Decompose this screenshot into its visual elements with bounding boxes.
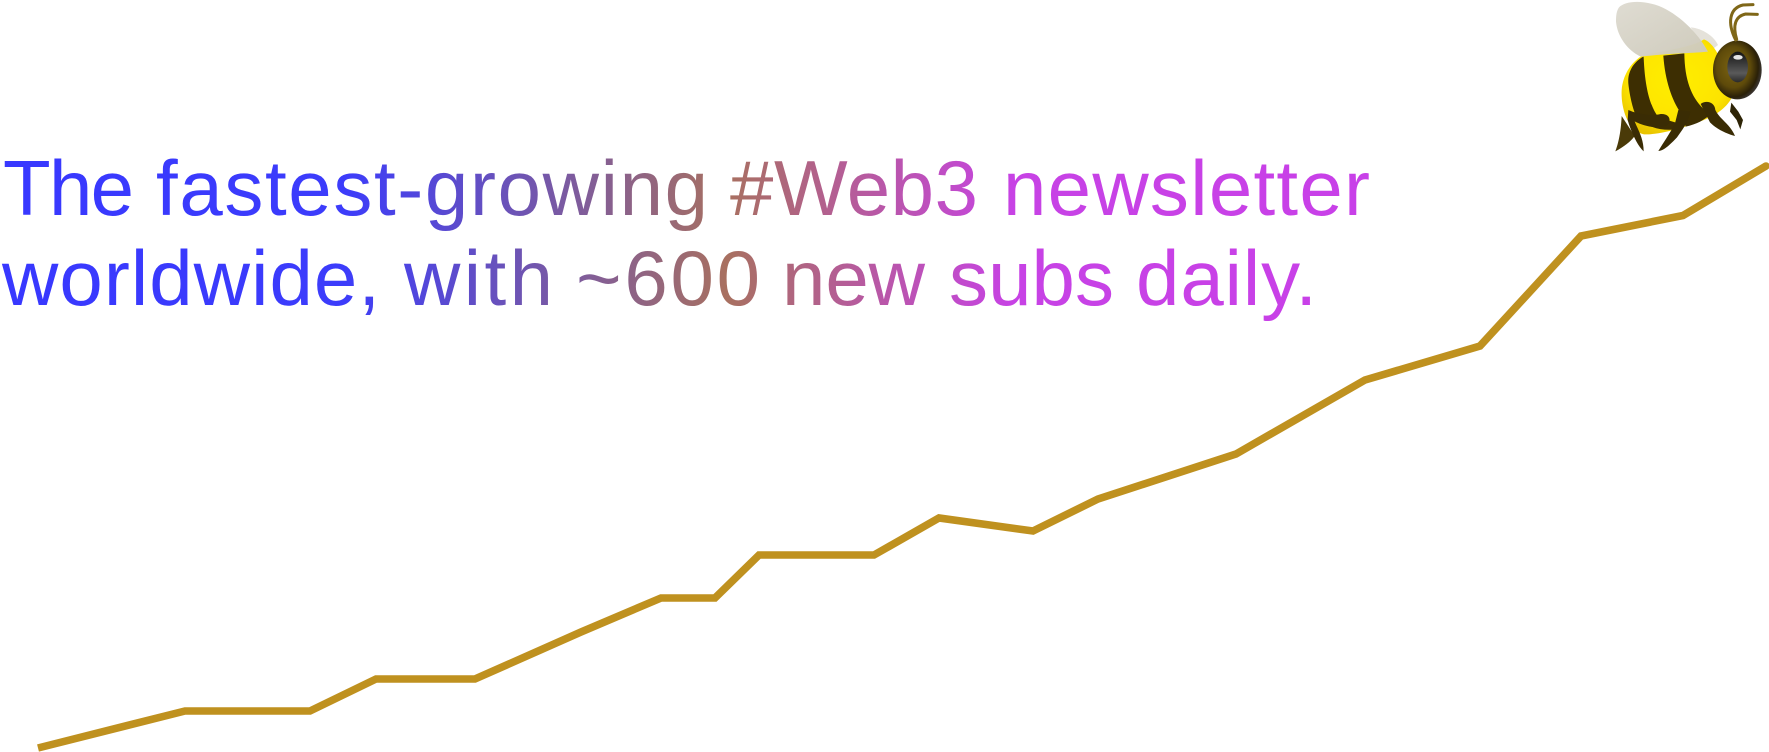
bee body bbox=[1622, 39, 1732, 134]
headline line 1: #Web3 bbox=[730, 144, 978, 232]
bee eye bbox=[1727, 52, 1748, 82]
headline line 1: newsletter bbox=[1003, 144, 1370, 232]
bee antennae bbox=[1731, 5, 1757, 40]
headline line 2: ~600 bbox=[576, 234, 760, 322]
headline line 2 bbox=[1, 234, 1317, 322]
bee far wing bbox=[1691, 27, 1718, 53]
headline line 1: fastest-growing bbox=[156, 144, 708, 232]
headline bbox=[1, 144, 1370, 322]
headline line 1: The bbox=[3, 144, 134, 232]
growth line chart bbox=[38, 162, 1769, 748]
bee near wing bbox=[1616, 2, 1708, 57]
headline line 2: subs bbox=[949, 234, 1114, 322]
bee head bbox=[1713, 41, 1762, 99]
bee stripes bbox=[1628, 57, 1684, 130]
headline line 1 bbox=[3, 144, 1370, 232]
icon: bee bbox=[1615, 2, 1762, 151]
headline line 2: worldwide, bbox=[1, 234, 380, 322]
headline line 2: with bbox=[403, 234, 553, 322]
headline line 2: daily. bbox=[1136, 234, 1317, 322]
headline line 2: new bbox=[782, 234, 926, 322]
bee far legs bbox=[1730, 103, 1743, 129]
bee near legs bbox=[1628, 102, 1735, 151]
bee stinger bbox=[1615, 116, 1635, 151]
